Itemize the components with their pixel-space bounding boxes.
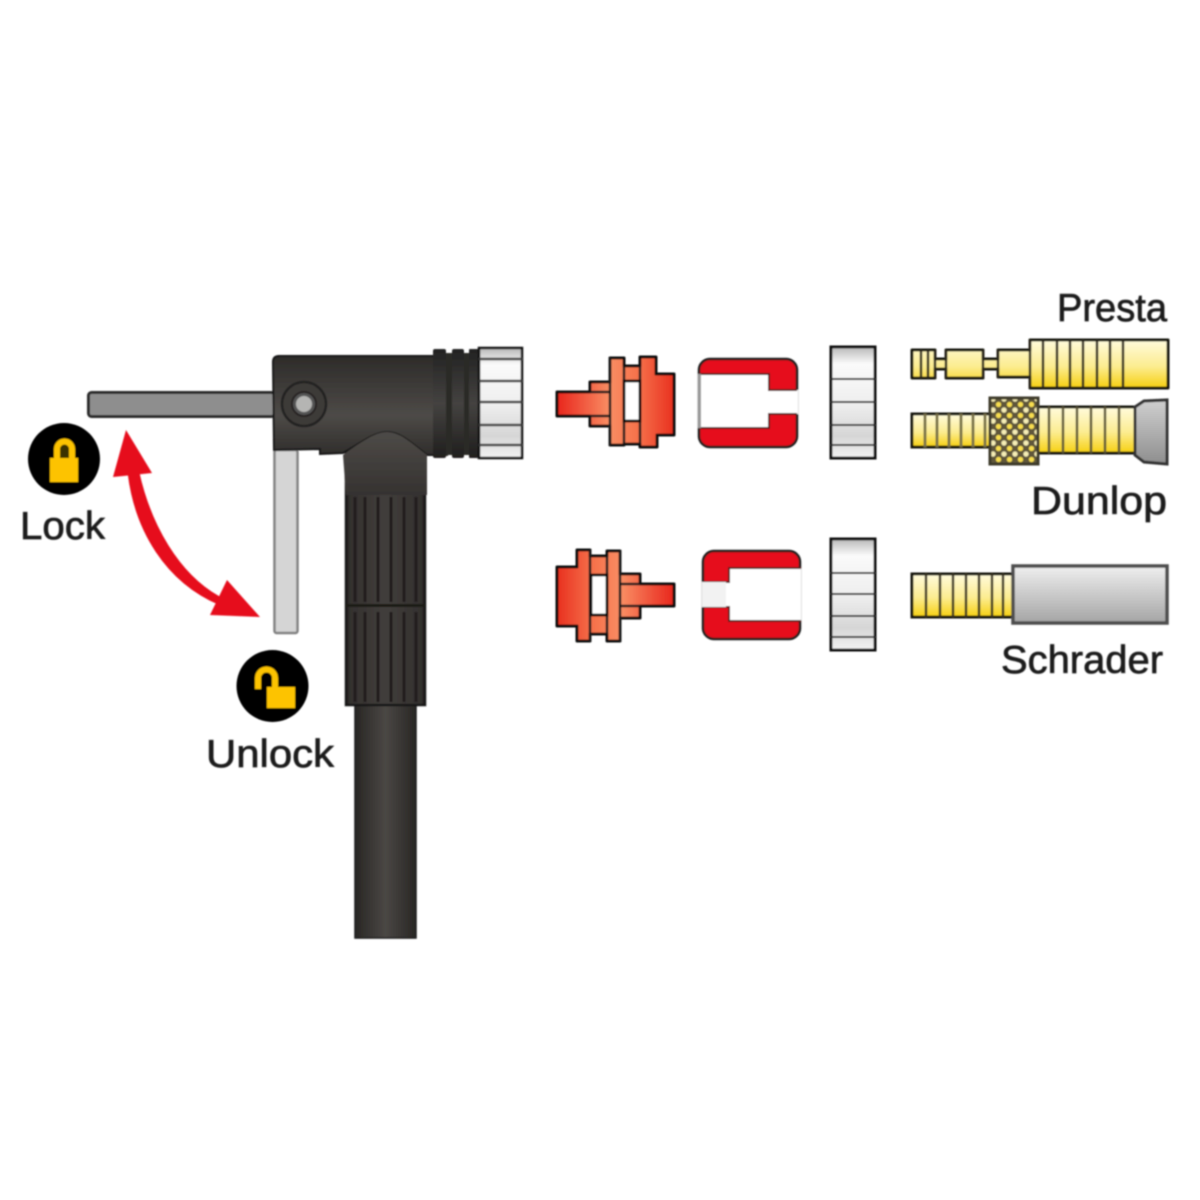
valve: Presta [912, 340, 1168, 388]
adapter: orange insert, top [557, 357, 674, 447]
grip with ribs [346, 440, 425, 705]
lever: unlocked position [274, 450, 298, 633]
pivot bolt [282, 382, 326, 426]
adapter: red clip, top [698, 359, 798, 447]
label: Lock: Lock [20, 505, 106, 548]
coupling body [273, 356, 442, 455]
nut: top [831, 347, 875, 458]
label: Dunlop: Dunlop [1031, 480, 1167, 523]
arrow: lock / unlock rotation [113, 430, 260, 617]
adapter: orange insert, bottom [557, 550, 674, 641]
metal sleeve [1013, 566, 1167, 623]
lever: locked position [88, 392, 274, 416]
valve: Schrader [912, 566, 1167, 623]
knurled nut [479, 348, 522, 458]
icon: unlocked padlock [236, 650, 308, 722]
rubber cap [1135, 400, 1167, 464]
hump of grip [343, 432, 427, 495]
label: Schrader: Schrader [1001, 639, 1163, 682]
nut: bottom [831, 539, 875, 650]
label: Unlock: Unlock [206, 733, 335, 776]
knurled collar [990, 398, 1038, 464]
label: Presta: Presta [1057, 287, 1167, 330]
adapter: red clip, bottom [702, 551, 801, 639]
valve: Dunlop [912, 398, 1167, 464]
pump head [273, 348, 522, 938]
hose [355, 704, 416, 938]
threaded rings [433, 349, 479, 458]
icon: locked padlock [28, 423, 100, 495]
